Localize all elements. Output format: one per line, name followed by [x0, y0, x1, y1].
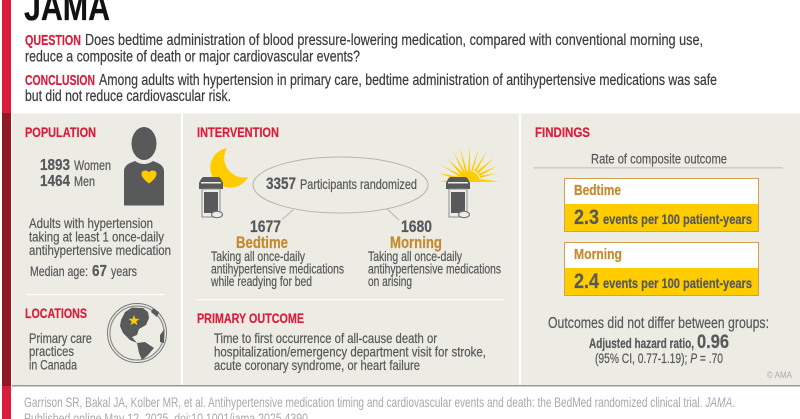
population counts	[40, 157, 111, 190]
result box: morning	[564, 242, 758, 296]
locations description: in Canada	[29, 356, 77, 372]
primary outcome description	[214, 330, 486, 373]
population description: antihypertensive medication	[29, 242, 171, 258]
bedtime group: Bedtime	[236, 234, 288, 252]
icon: moon	[210, 148, 248, 188]
population counts: 1464	[40, 173, 70, 190]
primary outcome description: Time to first occurrence of all-cause death or	[214, 330, 437, 346]
locations description: Primary care	[29, 330, 92, 346]
question text: reduce a composite of death or major cardiovascular events?	[25, 48, 360, 66]
primary outcome description: acute coronary syndrome, or heart failure	[214, 357, 420, 373]
outcomes summary: (95% CI, 0.77-1.19); P = .70	[595, 351, 723, 366]
accent bar	[2, 0, 11, 419]
population counts: 1893	[40, 157, 70, 174]
population description: Adults with hypertension	[29, 215, 153, 231]
result box: morning: 2.4	[574, 270, 599, 293]
conclusion text: CONCLUSION	[25, 72, 95, 89]
locations description	[29, 330, 92, 372]
question text	[25, 32, 703, 66]
result box: bedtime: events per 100 patient-years	[603, 211, 752, 227]
median age: 67	[92, 263, 107, 280]
median age: years	[111, 263, 137, 279]
primary outcome description: hospitalization/emergency department visit for stroke,	[214, 344, 486, 360]
question text: QUESTION	[25, 32, 81, 49]
copyright: © AMA	[767, 370, 793, 381]
participants oval	[253, 157, 428, 220]
bedtime group: Taking all once-daily	[211, 248, 305, 264]
panel: intervention and primary outcome	[183, 114, 519, 386]
population description: taking at least 1 once-daily	[29, 228, 164, 244]
morning group	[368, 218, 501, 289]
result box: bedtime	[564, 178, 758, 232]
citation	[24, 394, 735, 419]
outcomes summary: 0.96	[697, 332, 729, 353]
bedtime group	[210, 218, 344, 289]
icon: pill bottle morning	[446, 177, 470, 218]
result box: morning: events per 100 patient-years	[603, 275, 752, 291]
result box: bedtime: Bedtime	[574, 183, 621, 199]
morning group: on arising	[368, 273, 412, 289]
bedtime group: antihypertensive medications	[211, 260, 344, 276]
morning group: Morning	[390, 234, 442, 252]
heading: findings: FINDINGS	[535, 125, 590, 140]
population counts: Women	[74, 157, 111, 173]
chart title: Rate of composite outcome	[591, 150, 727, 166]
panel: population and locations	[12, 114, 181, 386]
icon: globe with star	[108, 304, 166, 362]
icon: pill bottle bedtime	[199, 177, 223, 218]
outcomes summary: Adjusted hazard ratio,	[589, 336, 694, 351]
morning group: antihypertensive medications	[368, 260, 501, 276]
heading: population: POPULATION	[25, 125, 96, 140]
icon: person with heart	[124, 127, 164, 206]
population description	[29, 215, 171, 258]
conclusion text: but did not reduce cardiovascular risk.	[25, 88, 231, 105]
morning group: Taking all once-daily	[368, 248, 462, 264]
heading: primary outcome: PRIMARY OUTCOME	[197, 311, 304, 326]
panel: findings	[521, 114, 800, 386]
locations description: practices	[29, 343, 74, 359]
result box: bedtime: 2.3	[574, 206, 599, 229]
median age	[30, 263, 137, 280]
median age: Median age:	[30, 263, 88, 279]
heading: intervention: INTERVENTION	[197, 125, 279, 140]
participants oval: 3357	[266, 175, 296, 193]
participants oval: Participants randomized	[300, 176, 417, 192]
population counts: Men	[74, 173, 95, 189]
outcomes summary	[548, 315, 769, 366]
bedtime group: while readying for bed	[210, 273, 312, 289]
bedtime group: 1677	[250, 218, 281, 236]
icon: sun	[437, 146, 499, 182]
heading: locations: LOCATIONS	[25, 306, 87, 321]
morning group: 1680	[401, 218, 432, 236]
result box: morning: Morning	[574, 247, 622, 263]
conclusion text	[25, 72, 717, 105]
